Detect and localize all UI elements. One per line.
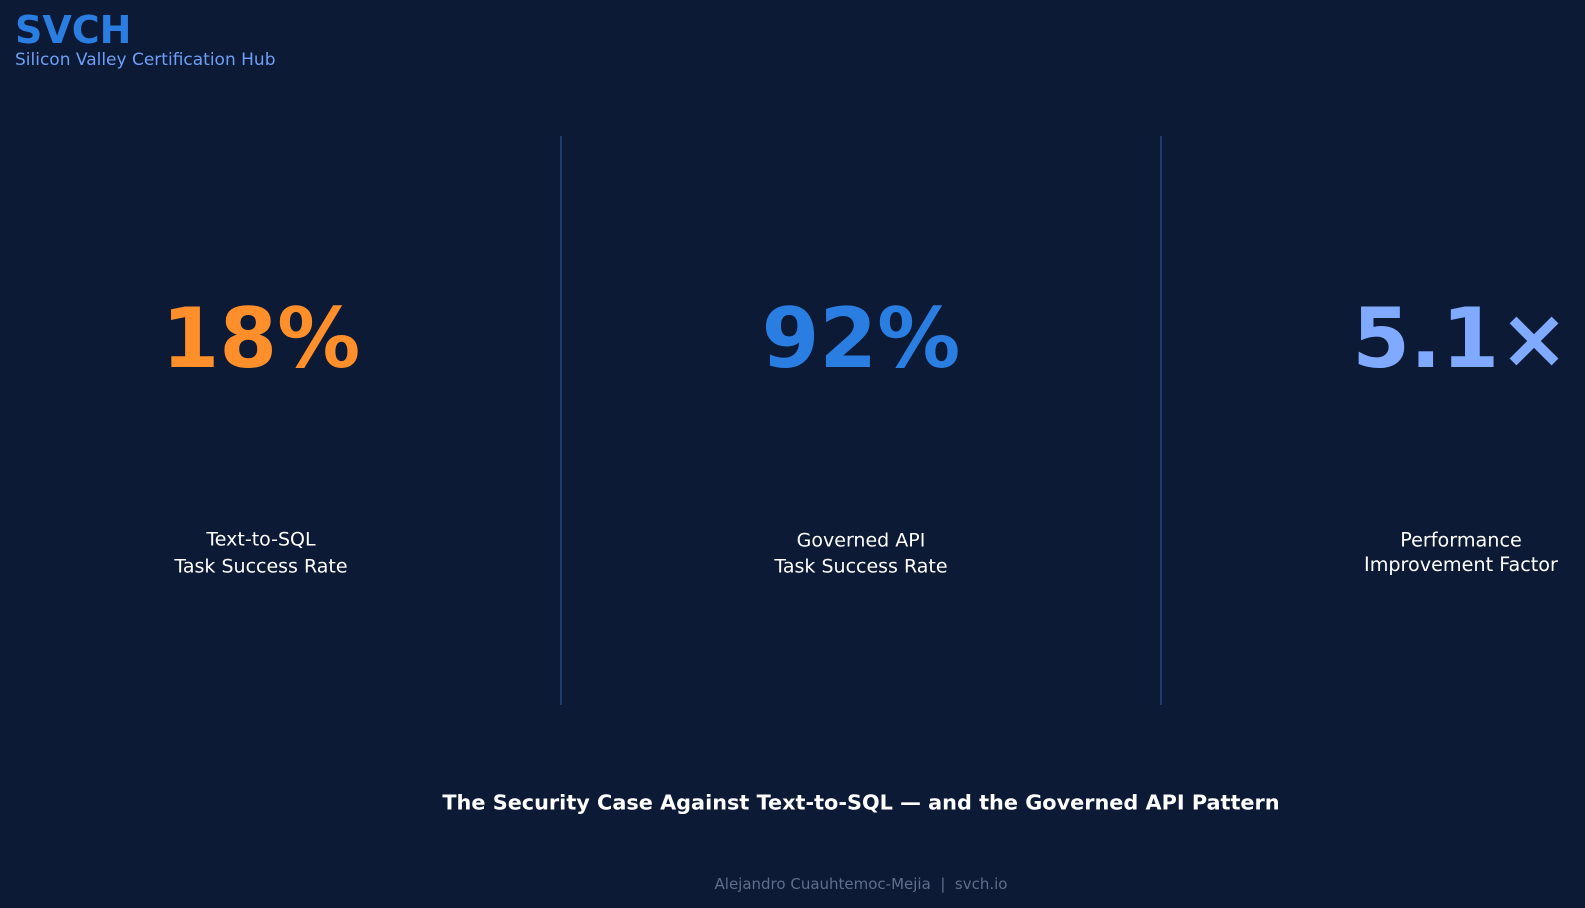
stat: performance improvement factor: 5.1× [1352,290,1569,387]
logo: SVCH brand: Silicon Valley Certification Hub [15,50,275,70]
stat: Governed API success rate: 92% [762,290,960,387]
stat: Text-to-SQL success rate: Text-to-SQL [205,528,316,550]
stat: performance improvement factor [1352,290,1569,576]
stat: Text-to-SQL success rate [162,290,360,578]
stat: Governed API success rate: Governed API [797,530,925,552]
title: The Security Case Against Text-to-SQL — and the Governed API Pattern [442,790,1280,814]
logo: SVCH brand [15,8,275,70]
stat: Text-to-SQL success rate: Task Success Rate [173,556,348,578]
stat: performance improvement factor: Performance [1400,528,1522,552]
stat: Text-to-SQL success rate: 18% [162,290,360,387]
stat: performance improvement factor: Improvement Factor [1364,553,1558,576]
stat: Governed API success rate: Task Success Rate [773,556,948,578]
footer credit: Alejandro Cuauhtemoc-Mejia | svch.io [715,875,1007,893]
logo: SVCH brand: SVCH [15,8,131,52]
stat: Governed API success rate [762,290,960,578]
